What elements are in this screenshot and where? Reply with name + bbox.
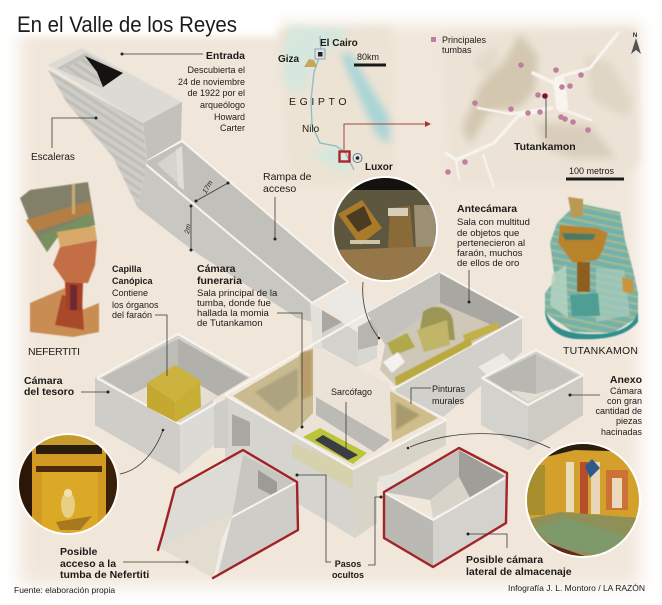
pale lappets [550,265,568,318]
text: Anexo: Cámara [610,386,642,396]
label: Posible acceso a la tumba de Nefertiti: tumba de Nefertiti [60,569,149,581]
scale: 100 metres: 100 metros [569,166,615,176]
text: Anexo [568,374,642,437]
text: Entrada: 24 de noviembre [178,77,245,87]
text: Cámara funeraria: tumba, donde fue [197,298,271,309]
label: Nefertiti: NEFERTITI [28,346,80,358]
legend: main tombs: Principales [442,35,487,45]
ramp outer wall [138,162,313,322]
source: Fuente: elaboración propia [14,585,115,595]
scale: 80 km: 80km [357,52,379,62]
treasures in antechamber [383,307,500,386]
passage pillar [310,303,322,350]
label: El Cairo: El Cairo [320,38,358,49]
arrow: to valley map [344,121,431,150]
text: Entrada [120,50,245,133]
text: Entrada: arqueólogo [200,100,245,110]
text: Anexo: cantidad de [595,406,642,416]
structure: annex chamber [478,350,583,450]
photo: mural paintings [525,442,641,558]
text: Entrada: Entrada [206,50,245,62]
label: Posible cámara lateral: Posible cámara [466,554,543,566]
ramp wall tops [143,141,348,303]
junction block [214,398,250,448]
structure: entrance tower and ramp [48,48,348,322]
label: Pasos ocultos: Pasos [335,559,361,569]
label: Pasos ocultos: ocultos [332,570,364,580]
tower stair opening [57,53,123,88]
credit: Infografía J. L. Montoro / LA RAZÓN [508,583,645,593]
curve: treasury callout [120,429,164,474]
label: Luxor: Luxor [365,162,393,173]
passage face [322,310,357,367]
shoulder gold [622,277,634,293]
valley wadis [446,33,618,187]
ramp channel [145,142,348,302]
structure: possible storage chamber [378,448,507,567]
label: Posible acceso a la tumba de Nefertiti [60,546,188,581]
dimension: 2 m: 2m [184,223,193,235]
text: Entrada: Descubierta el [187,65,245,75]
text: Antecámara: de ellos de oro [457,258,519,269]
inner wall band [316,397,390,452]
text: Capilla Canópica: del faraón [112,310,152,320]
curve: antechamber callout [363,282,380,339]
wall painting: right room [390,391,438,442]
tower stair face [48,70,147,208]
label: Posible acceso a la tumba de Nefertiti: acceso a la [60,558,116,570]
text: Capilla Canópica [112,264,167,376]
text: Cámara funeraria: funeraria [197,275,242,287]
crown [20,182,95,252]
text: Capilla Canópica: Contiene [112,288,148,298]
label: Posible cámara lateral: lateral de almacenaje [466,566,572,578]
label: Pinturas murales: murales [432,396,465,406]
structure: antechamber [367,272,522,417]
text: Anexo: hacinadas [601,427,642,437]
legend: main tombs [431,35,487,55]
face [558,225,608,263]
structure: possible access to Nefertiti tomb [158,450,298,578]
text: Antecámara: pertenecieron al [457,238,525,249]
text: Anexo: Anexo [610,374,642,386]
label: Posible cámara lateral [466,532,572,578]
wall painting: burial chamber [233,348,313,433]
sarcophagus front [292,442,353,490]
tomb markers [445,62,591,175]
wall tops [225,272,446,469]
neck [65,282,83,312]
text: Cámara funeraria: de Tutankamon [197,318,262,329]
label: Egipto: EGIPTO [289,96,350,108]
label: Posible acceso a la tumba de Nefertiti: Posible [60,546,98,558]
dimension: 17 m [194,180,230,202]
label: Giza: Giza [278,54,300,65]
tower top [48,48,182,123]
chamber floor [233,347,395,468]
callout: Tutankamon tomb [514,93,576,153]
icon: north arrow [631,33,641,54]
photo: antechamber objects [332,176,438,282]
legend: main tombs: tumbas [442,45,472,55]
dimension: 17 m: 17m [202,180,215,195]
front wall face [225,395,355,538]
headdress [545,203,638,333]
text: Cámara funeraria: hallada la momia [197,308,270,319]
label: Escaleras [31,116,98,163]
label: Nilo: Nilo [302,124,320,135]
face [53,240,97,283]
text: Capilla Canópica: los órganos [112,300,159,310]
text: Cámara funeraria [197,263,304,428]
label: Cámara del tesoro [24,375,110,398]
label: Cámara del tesoro: del tesoro [24,386,74,398]
label: Sarcófago: Sarcófago [331,387,372,397]
photo: treasury golden shrine [17,433,119,535]
label: Pinturas murales: Pinturas [432,384,466,394]
canopic chapel [147,365,201,422]
collar [545,310,638,339]
curve: mural paintings callout [407,434,550,449]
text: Anexo: con gran [607,396,642,406]
text: Capilla Canópica: Canópica [112,276,154,286]
label: Pinturas murales [411,384,466,406]
dimension: 2 m [184,204,193,252]
callout: Tutankamon tomb: Tutankamon [514,141,576,153]
label: Sarcófago [331,387,372,450]
passage top [322,285,378,330]
text: Entrada: Carter [220,123,245,133]
text: Anexo: piezas [616,416,642,426]
text: Antecámara: faraón, muchos [457,248,523,259]
text: Antecámara: Antecámara [457,203,517,215]
text: Antecámara: Sala con multitud [457,217,530,228]
label: Cámara del tesoro: Cámara [24,375,63,387]
river Nile [311,36,354,170]
text: Capilla Canópica: Capilla [112,264,143,274]
icon: El Cairo [315,49,325,59]
bust: Nefertiti [20,182,99,337]
scale: 100 metres [566,166,624,180]
title: En el Valle de los Reyes [17,12,237,37]
icon: Giza pyramids [304,59,317,67]
label: Escaleras: Escaleras [31,152,75,163]
tower right face [143,102,182,160]
text: Entrada: Howard [214,112,245,122]
text: Antecámara: de objetos que [457,228,519,239]
map: Valley of the Kings [431,28,641,187]
label: Rampa de acceso: acceso [263,183,296,195]
label: Rampa de acceso: Rampa de [263,171,312,183]
structure: treasury chamber [95,334,250,474]
icon: Luxor [353,154,362,162]
mask: Tutankamon [545,197,638,339]
scale: 80 km [354,52,386,66]
icon: Valley of the Kings marker [340,152,350,162]
map: Egypt [278,26,431,185]
label: Tutankamon mask: TUTANKAMON [563,345,638,357]
cobra and vulture [568,197,583,218]
text: Cámara funeraria: Cámara [197,263,236,275]
shoulders [30,288,99,337]
text: Cámara funeraria: Sala principal de la [197,288,278,299]
sarcophagus [303,428,367,464]
label: Rampa de acceso [263,171,312,240]
text: Entrada: de 1922 por el [187,88,245,98]
label: Pasos ocultos [296,474,382,580]
structure: main tomb body [214,272,446,538]
icon: north arrow: N [633,33,637,39]
text: Antecámara [457,203,530,304]
